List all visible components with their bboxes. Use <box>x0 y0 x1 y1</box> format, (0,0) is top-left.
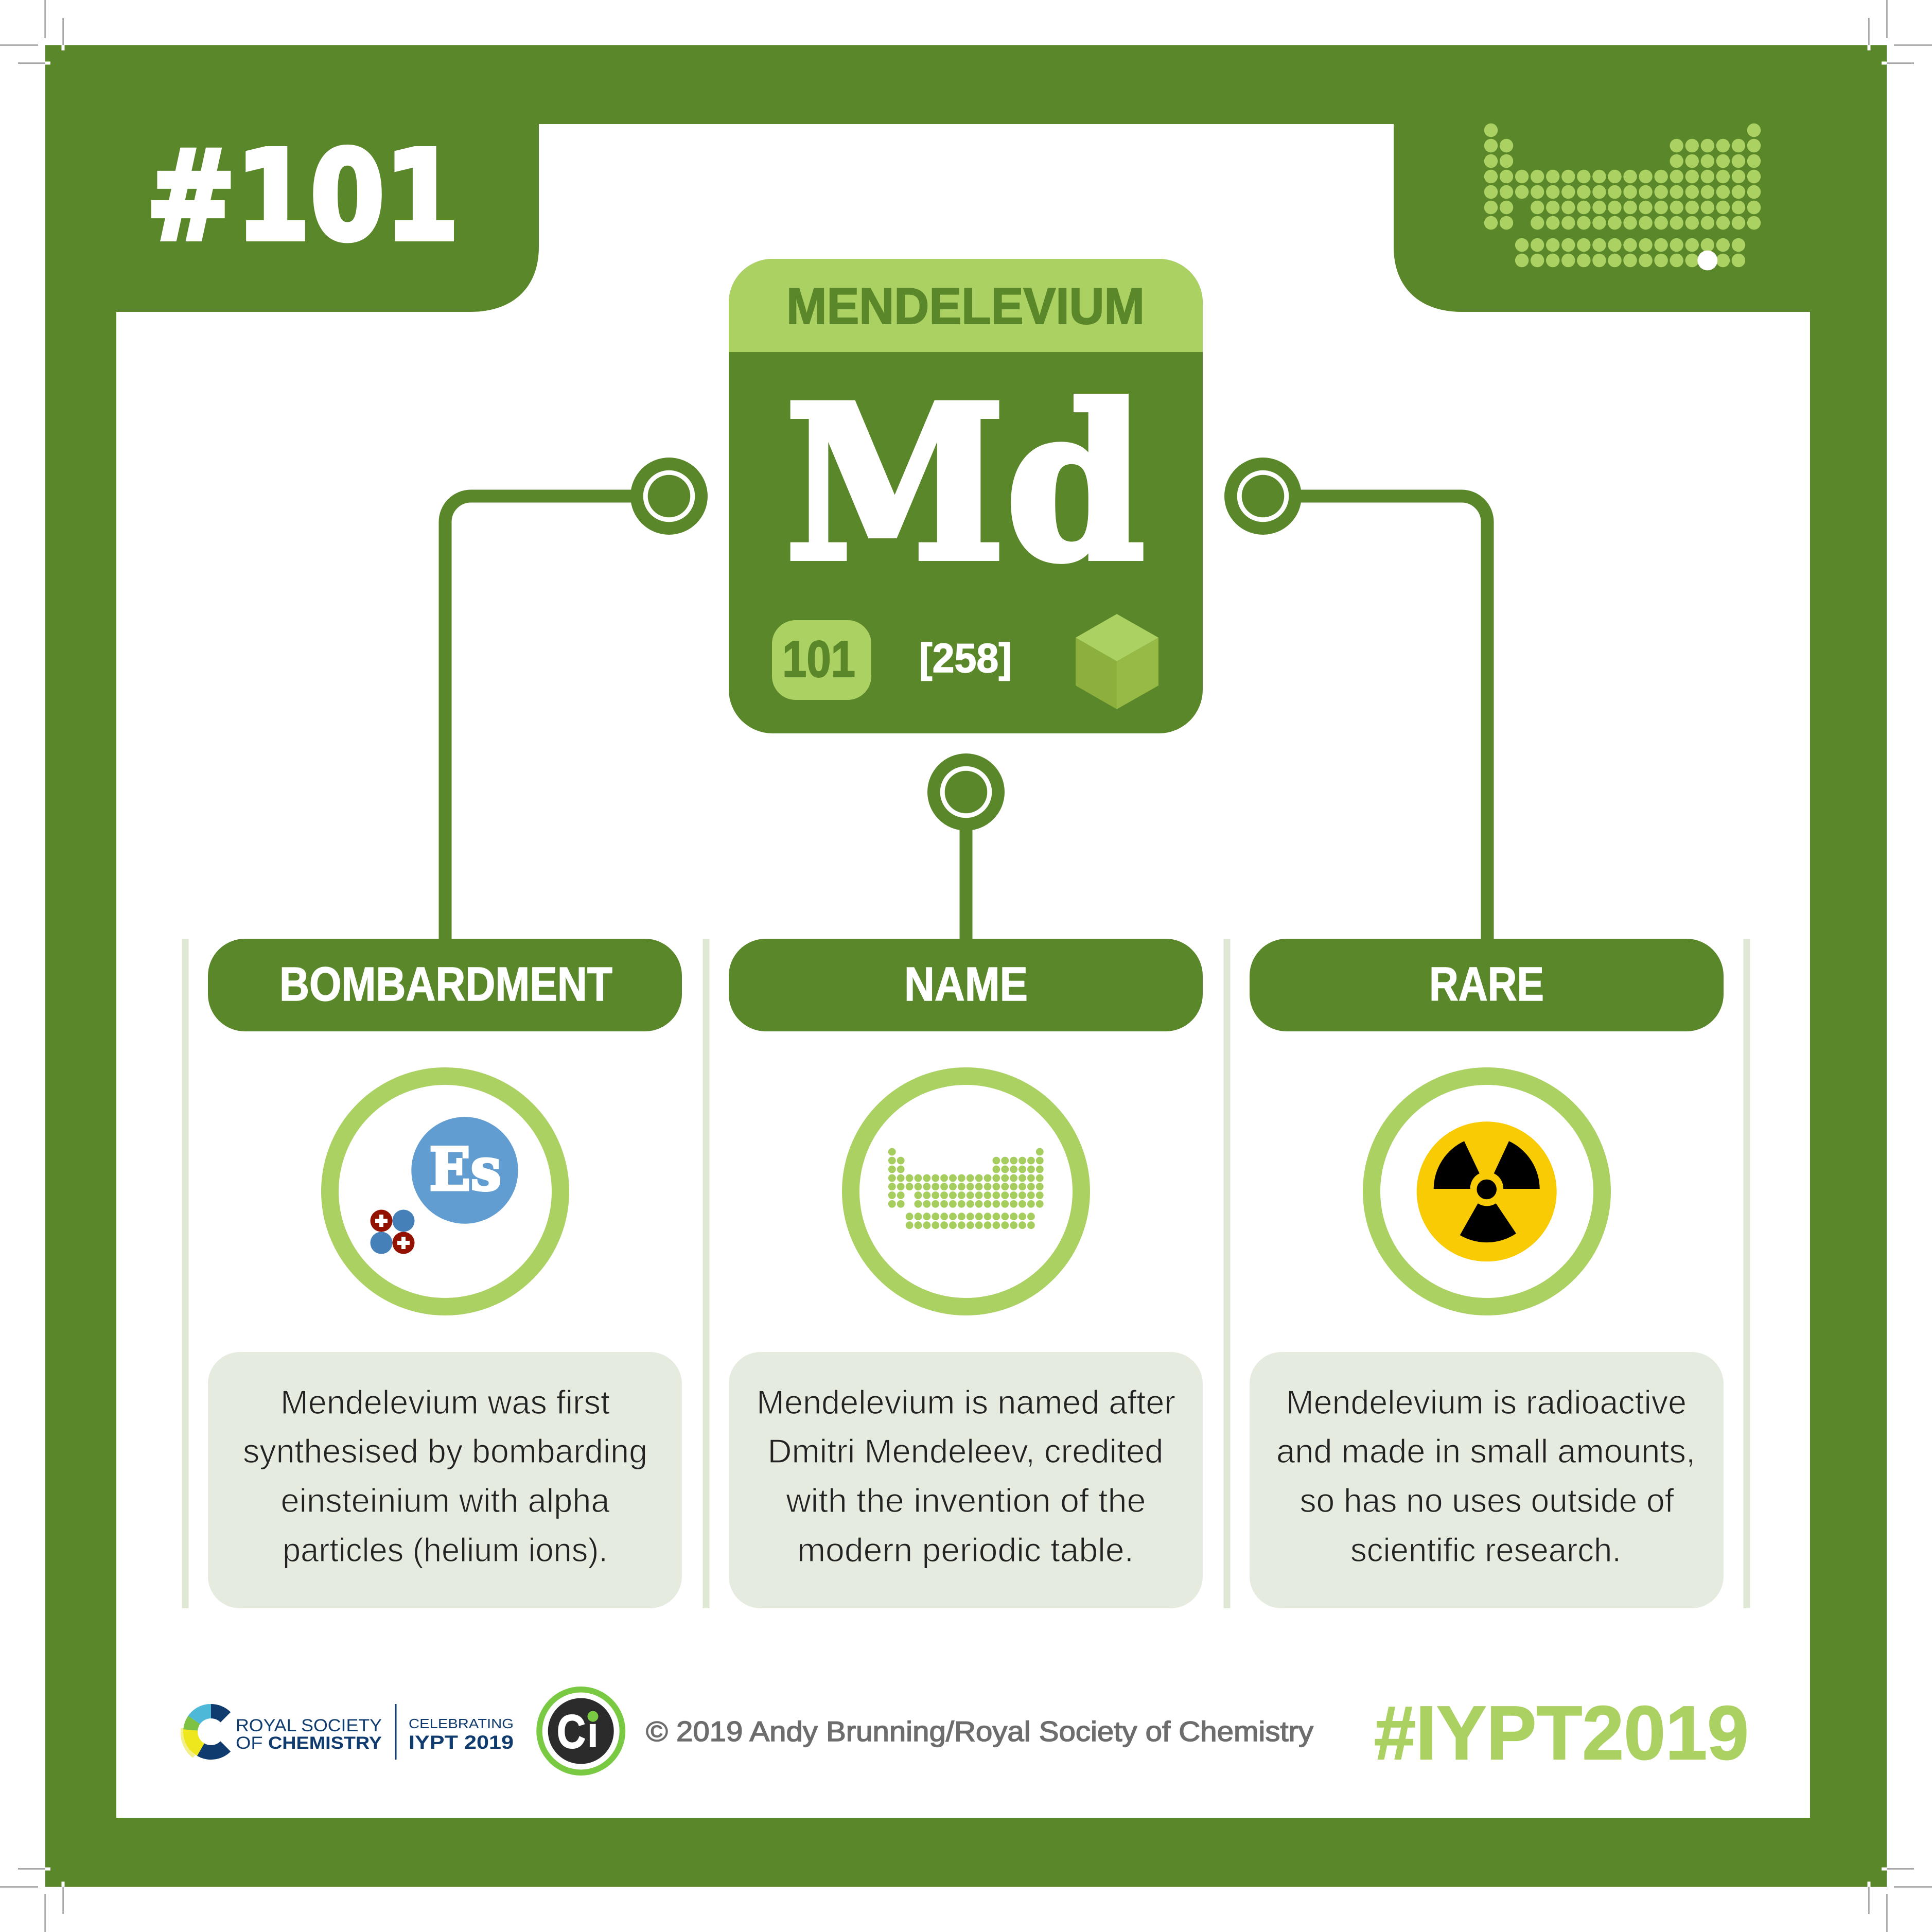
footer: Chemistry International logo: i <box>587 1708 599 1757</box>
column dividers <box>182 939 1750 1608</box>
icon: cube <box>1076 614 1158 709</box>
text box: Mendelevium is radioactive <box>1286 1383 1687 1421</box>
connector: right <box>1263 496 1487 942</box>
text box: synthesised by bombarding <box>243 1432 647 1470</box>
node: right <box>1224 458 1302 535</box>
highlighted element dot <box>1697 251 1717 270</box>
heading pill <box>1250 939 1724 1031</box>
organisation name: ROYAL SOCIETY <box>236 1716 382 1735</box>
text box: Mendelevium is named after <box>757 1383 1175 1421</box>
text box: and made in small amounts, <box>1276 1432 1695 1470</box>
atomic number badge <box>772 620 871 700</box>
text box: Dmitri Mendeleev, credited <box>768 1432 1163 1470</box>
connector: centre <box>959 792 973 942</box>
organisation name: OF CHEMISTRY <box>236 1733 382 1753</box>
footer: Royal Society of Chemistry logo <box>182 1704 514 1760</box>
heading pill <box>208 939 682 1031</box>
text box <box>729 1352 1203 1608</box>
text box: with the invention of the <box>785 1482 1146 1519</box>
panel: bombardment <box>208 939 682 1608</box>
element number title: #101 <box>146 124 459 268</box>
atomic mass: [258] <box>919 635 1012 681</box>
icon: radiation hazard <box>1372 1076 1602 1307</box>
heading pill <box>729 939 1203 1031</box>
footer: copyright: © 2019 Andy Brunning/Royal Society of Chemistry <box>646 1715 1314 1747</box>
text box <box>1250 1352 1724 1608</box>
connector: left <box>445 496 669 942</box>
footer: Chemistry International logo: C <box>557 1706 586 1758</box>
heading pill: BOMBARDMENT <box>279 957 612 1011</box>
text box: particles (helium ions). <box>283 1531 608 1569</box>
icon: alpha particle and einsteinium <box>330 1076 560 1307</box>
element symbol: Md <box>785 359 1145 608</box>
text box: so has no uses outside of <box>1300 1482 1674 1519</box>
panel: rare <box>1250 939 1724 1608</box>
atomic number badge: 101 <box>782 630 855 688</box>
element name: MENDELEVIUM <box>786 277 1145 335</box>
heading pill: RARE <box>1429 957 1544 1011</box>
footer: hashtag: #IYPT2019 <box>1374 1691 1749 1776</box>
node: centre <box>927 753 1005 831</box>
icon: periodic table locator <box>1491 130 1754 270</box>
heading pill: NAME <box>904 957 1028 1011</box>
organisation name <box>236 1716 382 1753</box>
node: left <box>630 458 708 535</box>
text box: Mendelevium was first <box>280 1383 610 1421</box>
panel: element card <box>729 259 1203 733</box>
icon: periodic table <box>851 1076 1081 1307</box>
text box <box>208 1352 682 1608</box>
panel: name <box>729 939 1203 1608</box>
footer: Chemistry International logo <box>536 1687 625 1776</box>
anniversary label: CELEBRATING <box>409 1716 514 1731</box>
text box: einsteinium with alpha <box>281 1482 610 1519</box>
icon: RSC C mark <box>182 1706 225 1757</box>
anniversary label <box>409 1716 514 1753</box>
text box: scientific research. <box>1350 1531 1621 1569</box>
icon: alpha particle and einsteinium: Es <box>429 1135 501 1204</box>
text box: modern periodic table. <box>797 1531 1134 1569</box>
anniversary label: IYPT 2019 <box>409 1732 514 1753</box>
